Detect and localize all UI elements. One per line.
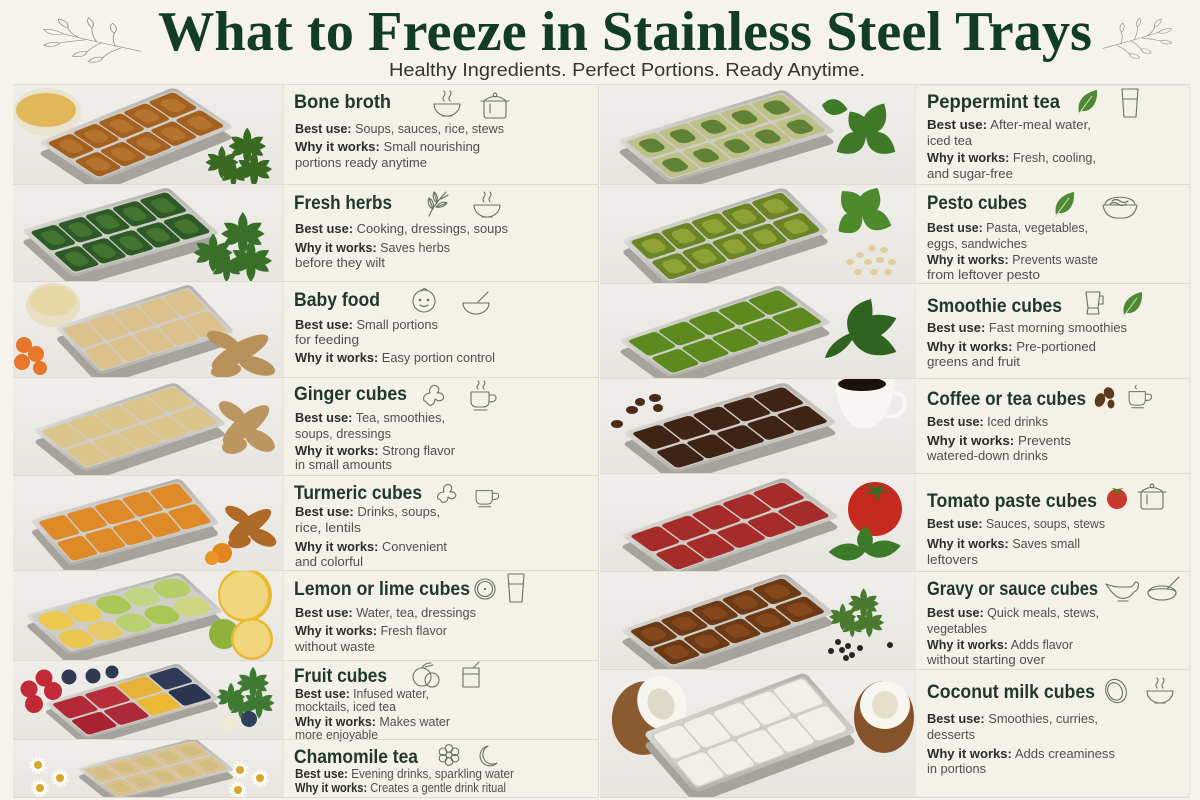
- heading: Pesto cubes: [927, 193, 1027, 214]
- icon: pasta bowl: [1103, 197, 1137, 218]
- icon: fruit: [413, 663, 439, 687]
- why it works: Why it works: Prevents: [927, 434, 1071, 448]
- best use: iced tea: [927, 134, 972, 148]
- icon: leaf: [1123, 292, 1142, 317]
- subtitle: Healthy Ingredients. Perfect Portions. Ready Anytime.: [389, 60, 865, 80]
- why it works: without starting over: [926, 653, 1045, 667]
- why it works: Why it works: Fresh flavor: [295, 624, 447, 638]
- heading: Coconut milk cubes: [927, 682, 1095, 703]
- why it works: and sugar-free: [927, 167, 1013, 181]
- photo: tomato tray: [600, 474, 915, 571]
- icon: tomato: [1107, 488, 1127, 509]
- why it works: [295, 140, 480, 170]
- icon: gravy boat: [1106, 582, 1138, 601]
- icon: pot: [1138, 484, 1166, 509]
- icon: coconut: [1102, 676, 1130, 706]
- why it works: Why it works: Pre-portioned: [927, 340, 1096, 354]
- panel: bone broth: [13, 85, 509, 193]
- why it works: [295, 444, 455, 472]
- heading: Gravy or sauce cubes: [927, 579, 1098, 600]
- heading: Lemon or lime cubes: [294, 579, 470, 600]
- why it works: Why it works: Adds creaminess: [927, 747, 1115, 761]
- icon: glass: [1122, 89, 1138, 117]
- best use: Best use: Cooking, dressings, soups: [295, 222, 508, 236]
- best use: Best use: Tea, smoothies,: [295, 411, 445, 425]
- best use: Best use: Drinks, soups,: [295, 505, 440, 519]
- best use: Best use: Water, tea, dressings: [295, 606, 476, 620]
- why it works: [927, 747, 1115, 776]
- why it works: [927, 537, 1080, 567]
- photo: baby food tray: [13, 283, 282, 377]
- icon: flower: [439, 745, 459, 765]
- photo: fruit tray: [13, 664, 282, 739]
- best use: Best use: Evening drinks, sparkling water: [295, 767, 514, 781]
- panel: gravy or sauce cubes: [600, 572, 1179, 681]
- best use: rice, lentils: [295, 521, 361, 535]
- why it works: and colorful: [295, 555, 363, 569]
- panel: baby food: [13, 282, 495, 386]
- best use: [295, 687, 429, 714]
- heading: Baby food: [294, 290, 380, 311]
- panel: text backgrounds: [283, 85, 1190, 797]
- best use: for feeding: [295, 333, 359, 347]
- icon: tea cup: [476, 491, 499, 507]
- best use: Best use: Soups, sauces, rice, stews: [295, 122, 504, 136]
- best use: Best use: Pasta, vegetables,: [927, 221, 1088, 235]
- icon: drink with straw: [463, 662, 479, 687]
- why it works: [294, 624, 447, 654]
- icon: steaming bowl: [434, 91, 460, 116]
- best use: [927, 221, 1088, 251]
- heading: Fresh herbs: [294, 193, 392, 214]
- best use: [295, 411, 445, 441]
- best use: eggs, sandwiches: [927, 237, 1027, 251]
- why it works: without waste: [294, 640, 375, 654]
- heading: Peppermint tea: [927, 92, 1060, 113]
- icon: right leaf sprig: [1103, 18, 1172, 58]
- photo: ginger tray: [13, 383, 282, 475]
- why it works: more enjoyable: [295, 728, 378, 742]
- icon: glass: [508, 574, 524, 602]
- best use: Best use: Fast morning smoothies: [927, 321, 1127, 335]
- icon: steaming bowl: [474, 192, 500, 217]
- panel: coconut milk cubes: [600, 667, 1173, 800]
- why it works: in small amounts: [295, 458, 392, 472]
- heading: Bone broth: [294, 92, 391, 113]
- heading: Tomato paste cubes: [927, 491, 1097, 512]
- photo: gravy tray: [600, 572, 915, 669]
- why it works: Why it works: Easy portion control: [295, 351, 495, 365]
- best use: vegetables: [927, 622, 987, 636]
- why it works: from leftover pesto: [927, 268, 1040, 282]
- photo: pesto tray: [600, 185, 915, 283]
- best use: [295, 505, 440, 535]
- why it works: portions ready anytime: [295, 156, 427, 170]
- title: What to Freeze in Stainless Steel Trays: [158, 1, 1092, 63]
- best use: Best use: Sauces, soups, stews: [927, 517, 1105, 531]
- panel: tomato paste cubes: [600, 474, 1166, 586]
- icon: moon: [480, 746, 497, 766]
- why it works: [926, 638, 1073, 667]
- why it works: [295, 241, 450, 270]
- panel: peppermint tea: [600, 85, 1138, 194]
- best use: Best use: After-meal water,: [927, 118, 1091, 132]
- why it works: Why it works: Prevents waste: [927, 253, 1098, 267]
- best use: Best use: Small portions: [295, 318, 438, 332]
- photo: chamomile tray: [13, 740, 282, 797]
- heading: Smoothie cubes: [927, 296, 1062, 317]
- icon: steaming bowl: [1147, 678, 1173, 703]
- best use: mocktails, iced tea: [295, 700, 396, 714]
- panel: pesto cubes: [600, 183, 1137, 296]
- icon: cup: [1129, 385, 1152, 408]
- why it works: greens and fruit: [927, 355, 1021, 369]
- why it works: Why it works: Small nourishing: [295, 140, 480, 154]
- why it works: Why it works: Adds flavor: [927, 638, 1073, 652]
- why it works: Why it works: Saves herbs: [295, 241, 450, 255]
- why it works: leftovers: [927, 553, 978, 567]
- why it works: [927, 340, 1096, 369]
- photo: coffee tray: [600, 379, 915, 473]
- why it works: in portions: [927, 762, 986, 776]
- why it works: [295, 715, 450, 742]
- icon: turmeric root: [438, 484, 456, 502]
- why it works: [927, 151, 1096, 181]
- icon: blender: [1086, 292, 1103, 314]
- best use: [927, 606, 1099, 636]
- best use: Best use: Smoothies, curries,: [927, 712, 1098, 726]
- heading: Chamomile tea: [294, 747, 418, 768]
- why it works: watered-down drinks: [926, 449, 1048, 463]
- photo: fresh herbs tray: [13, 188, 282, 281]
- best use: [927, 118, 1091, 148]
- icon: pot: [481, 93, 509, 118]
- icon: herb sprig: [428, 192, 448, 216]
- photo: peppermint tray: [600, 88, 915, 184]
- icon: leaf: [1078, 90, 1097, 115]
- icon: left leaf sprig: [44, 18, 141, 62]
- why it works: before they wilt: [295, 256, 386, 270]
- photo: bone broth tray: [13, 88, 282, 184]
- photo: coconut tray: [600, 670, 915, 797]
- panel: coffee or tea cubes: [600, 377, 1152, 484]
- panel: chamomile tea: [13, 738, 514, 800]
- icon: baby face: [413, 289, 435, 312]
- heading: Fruit cubes: [294, 666, 387, 687]
- heading: Coffee or tea cubes: [927, 389, 1086, 410]
- why it works: Why it works: Fresh, cooling,: [927, 151, 1096, 165]
- why it works: Why it works: Saves small: [927, 537, 1080, 551]
- best use: [295, 318, 438, 347]
- icon: bowl and spoon: [463, 292, 489, 314]
- panel: turmeric cubes: [13, 476, 499, 577]
- photo: smoothie tray: [600, 284, 915, 378]
- icon: citrus slice: [475, 579, 495, 599]
- panel: fruit cubes: [13, 661, 479, 747]
- best use: [927, 712, 1098, 742]
- why it works: Why it works: Makes water: [295, 715, 450, 729]
- icon: tea cup: [471, 381, 496, 410]
- best use: soups, dressings: [295, 427, 391, 441]
- photo: turmeric tray: [13, 479, 282, 570]
- icon: ginger root: [424, 385, 444, 405]
- icon: leaf: [1055, 192, 1074, 217]
- why it works: Why it works: Creates a gentle drink ritual: [295, 781, 506, 795]
- icon: coffee beans: [1093, 385, 1116, 408]
- panel: ginger cubes: [13, 378, 496, 483]
- heading: Turmeric cubes: [294, 483, 422, 504]
- why it works: [926, 434, 1071, 463]
- icon: pan with spoon: [1148, 577, 1179, 600]
- panel: lemon or lime cubes: [13, 568, 524, 665]
- photo: lemon and lime tray: [13, 571, 282, 660]
- why it works: Why it works: Strong flavor: [295, 444, 455, 458]
- why it works: Why it works: Convenient: [295, 540, 448, 554]
- panel: smoothie cubes: [600, 284, 1142, 389]
- best use: Best use: Infused water,: [295, 687, 429, 701]
- why it works: [927, 253, 1098, 282]
- best use: Best use: Quick meals, stews,: [927, 606, 1099, 620]
- best use: Best use: Iced drinks: [927, 415, 1048, 429]
- heading: Ginger cubes: [294, 384, 407, 405]
- why it works: [295, 540, 448, 569]
- panel: fresh herbs: [13, 185, 508, 288]
- best use: desserts: [927, 728, 975, 742]
